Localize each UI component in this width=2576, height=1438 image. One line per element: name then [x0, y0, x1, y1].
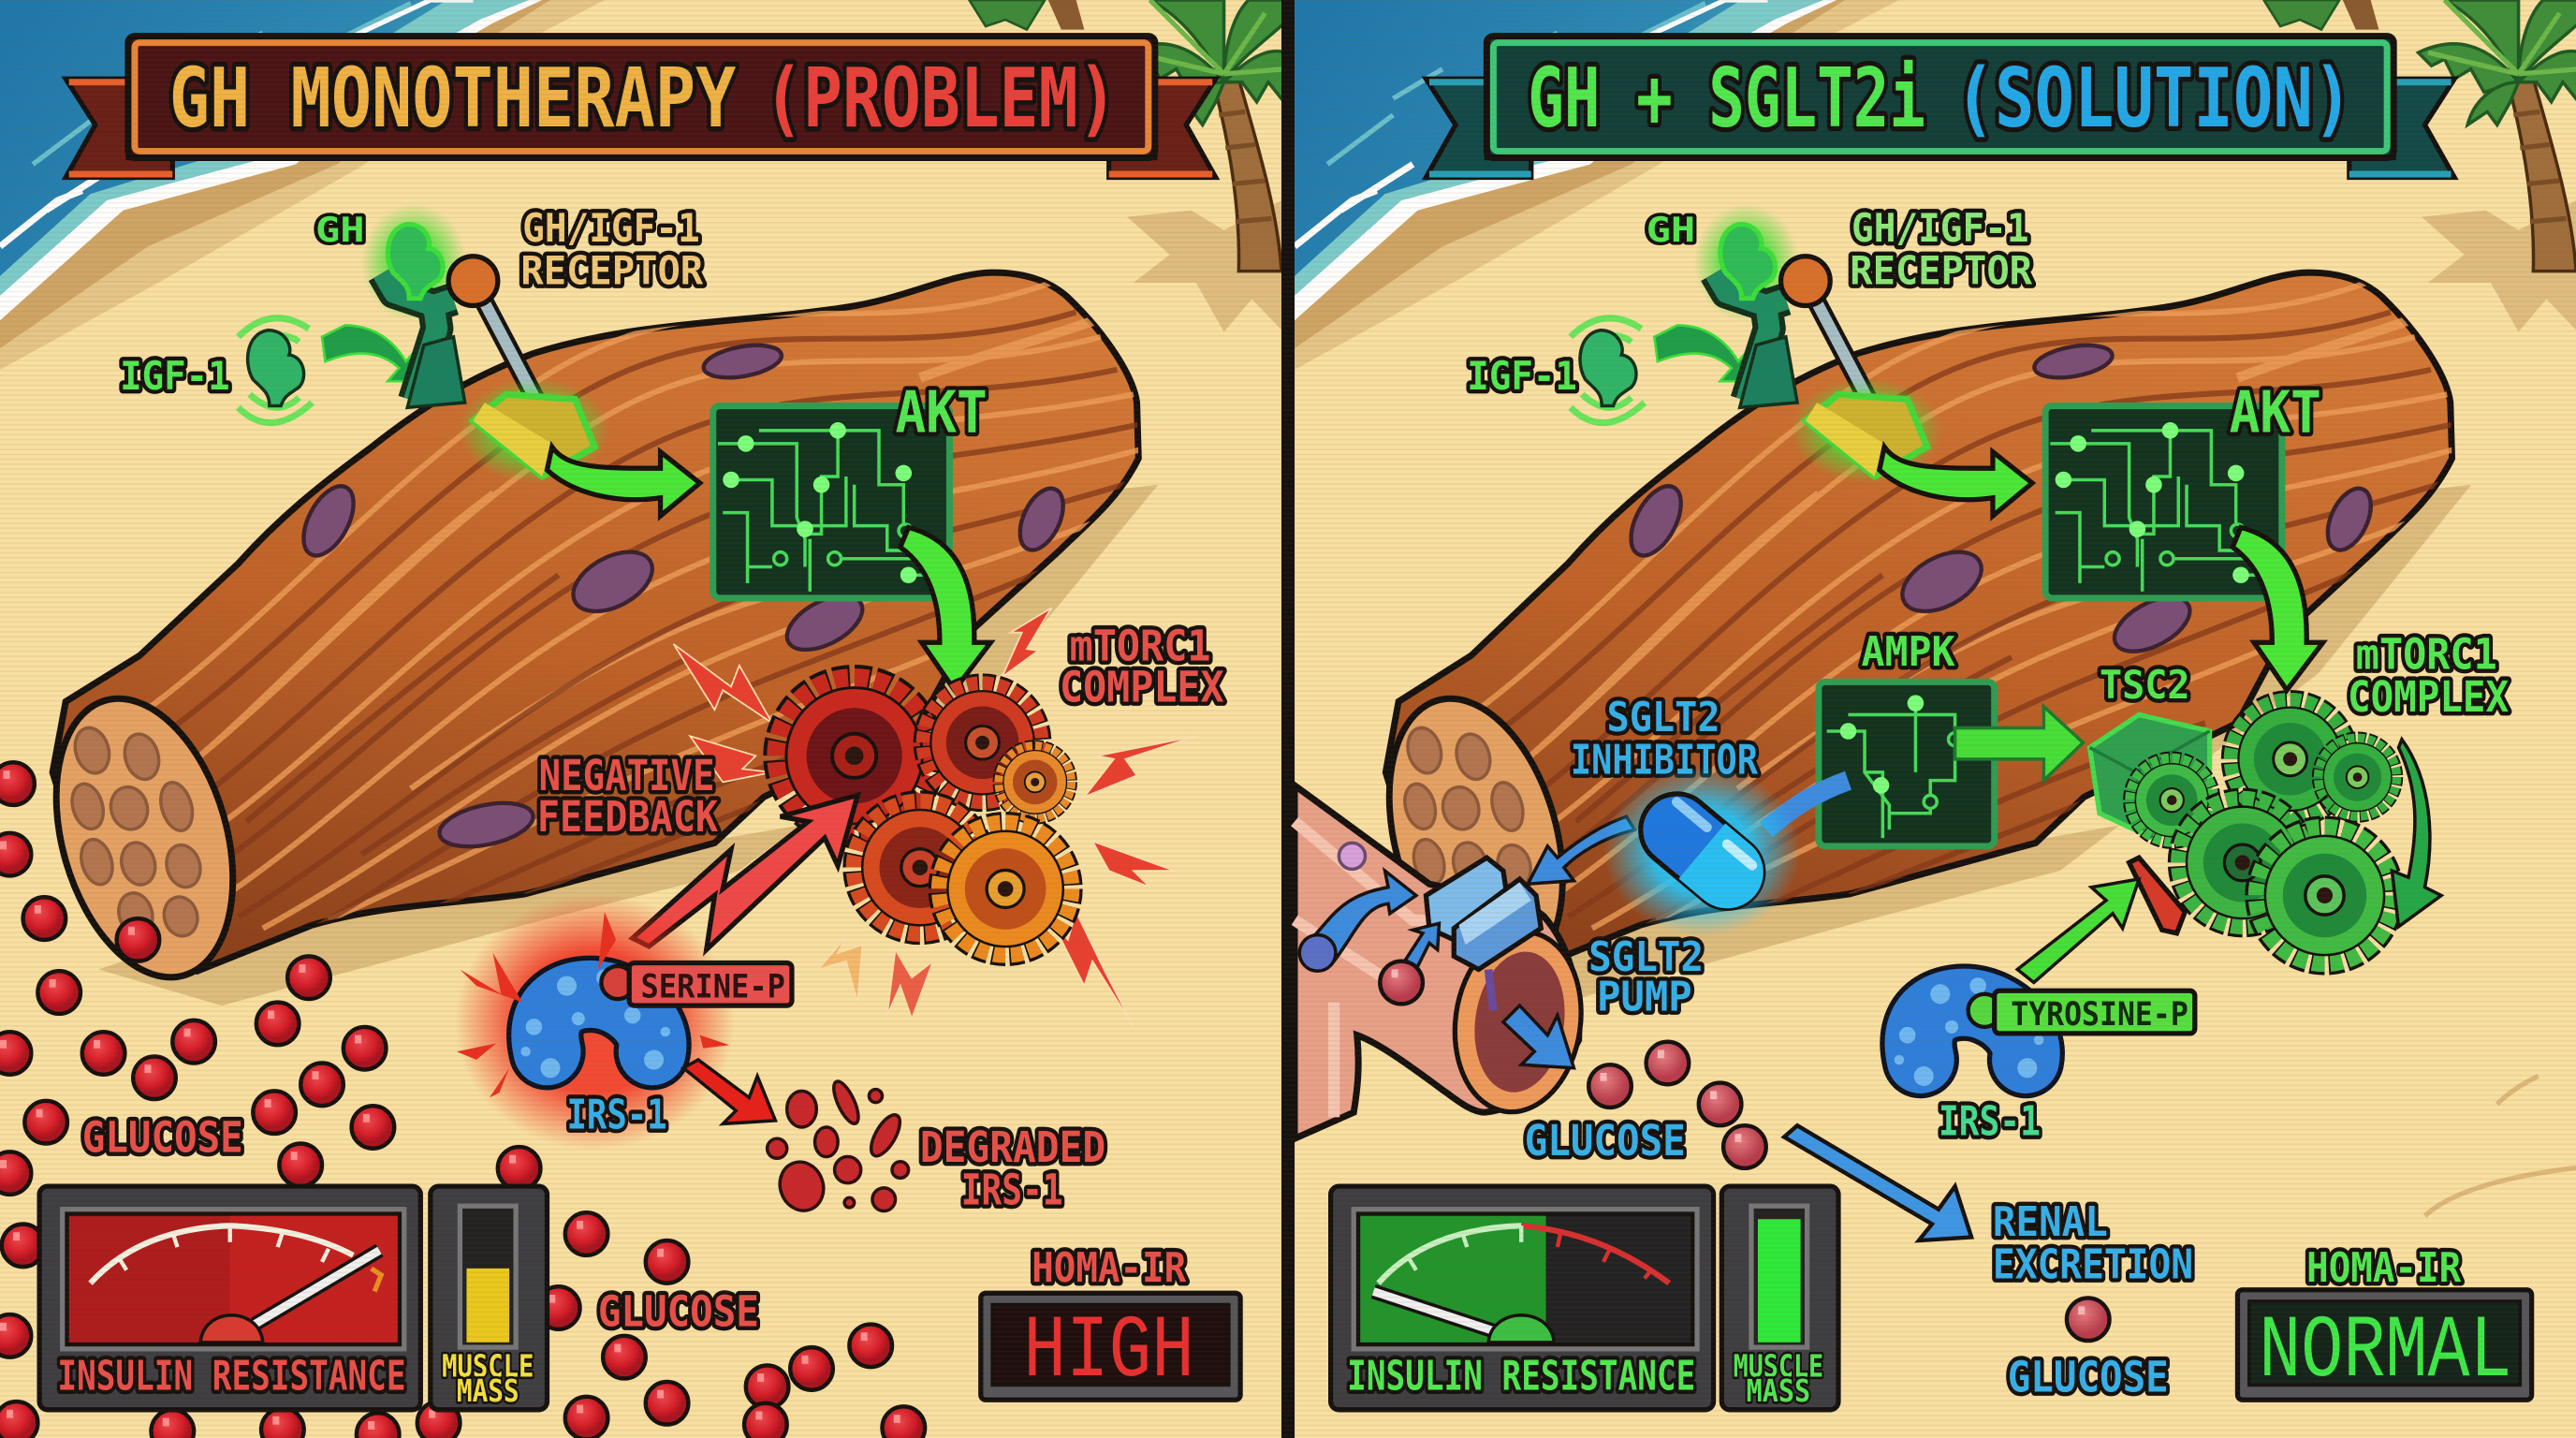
degraded IRS-1 fragments [768, 1078, 909, 1217]
kidney tubule [1295, 785, 1592, 1138]
label TSC2: TSC2 [2100, 662, 2190, 708]
panel: right muscle fiber [1360, 272, 2471, 1005]
label SGLT2 pump: PUMP [1597, 973, 1692, 1020]
blue arrow renal excretion [1784, 1125, 1971, 1240]
title text: GH monotherapy: GH MONOTHERAPY [169, 51, 736, 146]
red lightning arrow negative feedback [633, 795, 857, 949]
muscle nuclei right [1621, 340, 2379, 663]
AMPK panel [1819, 682, 1995, 846]
label receptor right [1850, 205, 2033, 294]
label IRS-1 right: IRS-1 [1939, 1098, 2041, 1146]
panel: background right beach [1295, 0, 2576, 1438]
HOMA-IR readout right [2237, 1244, 2532, 1402]
label mTORC1 left [1060, 622, 1224, 712]
sand marks [2425, 1077, 2576, 1216]
red arrow to degraded [683, 1060, 775, 1123]
label receptor left: RECEPTOR [520, 248, 704, 294]
receptor, AKT and arrows left [238, 204, 990, 690]
label AKT right: AKT [2230, 380, 2321, 447]
label AKT left: AKT [896, 380, 988, 447]
red sparks around gears [674, 608, 1196, 1027]
TSC2 green hex block [2089, 714, 2210, 838]
label muscle mass left [442, 1348, 534, 1409]
label renal excretion: RENAL [1993, 1198, 2108, 1246]
glucose molecules left [0, 762, 925, 1438]
label negative feedback: FEEDBACK [537, 792, 718, 842]
red inhibitor wedge [2130, 858, 2185, 933]
label SGLT2 inhibitor: INHIBITOR [1571, 737, 1758, 785]
panel: left muscle fiber [26, 272, 1158, 1005]
label degraded IRS-1: IRS-1 [961, 1165, 1063, 1214]
muscle mass meter left [431, 1186, 547, 1410]
label mTORC1 left: mTORC1 [1070, 622, 1211, 671]
label SGLT2 inhibitor: SGLT2 [1606, 694, 1720, 741]
label SGLT2 pump [1588, 933, 1704, 1020]
muscle nuclei left [293, 340, 1072, 854]
panel: background left beach [0, 0, 1288, 1438]
label glucose right 1: GLUCOSE [1525, 1116, 1686, 1166]
label insulin resistance left: INSULIN RESISTANCE [57, 1353, 406, 1401]
gears mTORC1 right [2130, 700, 2396, 963]
label receptor right: GH/IGF-1 [1852, 205, 2029, 251]
pill SGLT2 inhibitor with glow [1528, 766, 1848, 936]
title text: GH + SGLT2i: GH + SGLT2i [1528, 51, 1925, 146]
label muscle mass right: MUSCLE [1734, 1348, 1823, 1385]
label insulin resistance right: INSULIN RESISTANCE [1347, 1353, 1695, 1401]
label mTORC1 right: COMPLEX [2348, 672, 2509, 722]
label GH right: GH [1647, 210, 1695, 250]
title text: problem: (PROBLEM) [764, 51, 1117, 146]
label AMPK: AMPK [1862, 628, 1955, 676]
label muscle mass left: MUSCLE [442, 1348, 534, 1385]
label mTORC1 left: COMPLEX [1060, 662, 1224, 712]
label renal excretion: EXCRETION [1993, 1240, 2193, 1288]
IRS-1 protein left with red glow [455, 894, 735, 1151]
value NORMAL: NORMAL [2259, 1302, 2512, 1402]
green curved arrow right [2392, 740, 2441, 927]
label renal excretion [1993, 1198, 2193, 1288]
muscle mass meter right [1721, 1186, 1838, 1410]
label mTORC1 right: mTORC1 [2356, 629, 2497, 679]
title text: solution: (SOLUTION) [1955, 51, 2352, 146]
label receptor left [520, 205, 704, 294]
label IGF-1 left: IGF-1 [120, 353, 230, 399]
center divider [1281, 0, 1295, 1438]
tag Tyrosine-P [1969, 990, 2195, 1034]
banner: left title [66, 37, 1216, 178]
label GH left: GH [315, 210, 365, 250]
tag Tyrosine-P: TYROSINE-P [2011, 995, 2188, 1034]
label glucose left 1: GLUCOSE [82, 1112, 243, 1162]
IRS-1 protein right [1895, 977, 2043, 1086]
HOMA-IR readout right: HOMA-IR [2306, 1244, 2462, 1292]
banner: right title [1426, 37, 2454, 178]
label negative feedback [537, 751, 718, 842]
green arrow AMPK to TSC2 [1955, 707, 2083, 781]
tag Serine-P [601, 962, 792, 1005]
label receptor left: GH/IGF-1 [522, 205, 700, 251]
label receptor right: RECEPTOR [1850, 248, 2033, 294]
HOMA-IR readout left: HOMA-IR [1032, 1244, 1187, 1292]
gauge insulin resistance right [1331, 1186, 1714, 1410]
gauge insulin resistance left [39, 1186, 420, 1410]
label IRS-1 left: IRS-1 [567, 1092, 667, 1139]
HOMA-IR readout left [981, 1244, 1240, 1402]
label negative feedback: NEGATIVE [539, 751, 714, 800]
label glucose left 2: GLUCOSE [598, 1286, 759, 1336]
label SGLT2 pump: SGLT2 [1588, 933, 1704, 981]
glucose molecules right [1588, 1042, 2110, 1341]
label muscle mass right [1734, 1348, 1823, 1409]
SGLT2 pump [1299, 843, 1573, 1068]
label degraded IRS-1: DEGRADED [920, 1123, 1105, 1172]
receptor, AKT and arrows right [1571, 204, 2323, 690]
gears mTORC1 left [777, 679, 1071, 954]
green arrow IRS-1 to mTOR [2017, 879, 2139, 983]
label degraded IRS-1 [920, 1123, 1105, 1214]
label muscle mass left: MASS [457, 1372, 520, 1409]
tag Serine-P: SERINE-P [640, 967, 785, 1005]
label IGF-1 right: IGF-1 [1467, 353, 1577, 399]
label muscle mass right: MASS [1747, 1372, 1810, 1409]
label glucose right 2: GLUCOSE [2008, 1353, 2169, 1402]
value HIGH: HIGH [1023, 1302, 1194, 1402]
label mTORC1 right [2348, 629, 2509, 722]
label SGLT2 inhibitor [1571, 694, 1758, 785]
